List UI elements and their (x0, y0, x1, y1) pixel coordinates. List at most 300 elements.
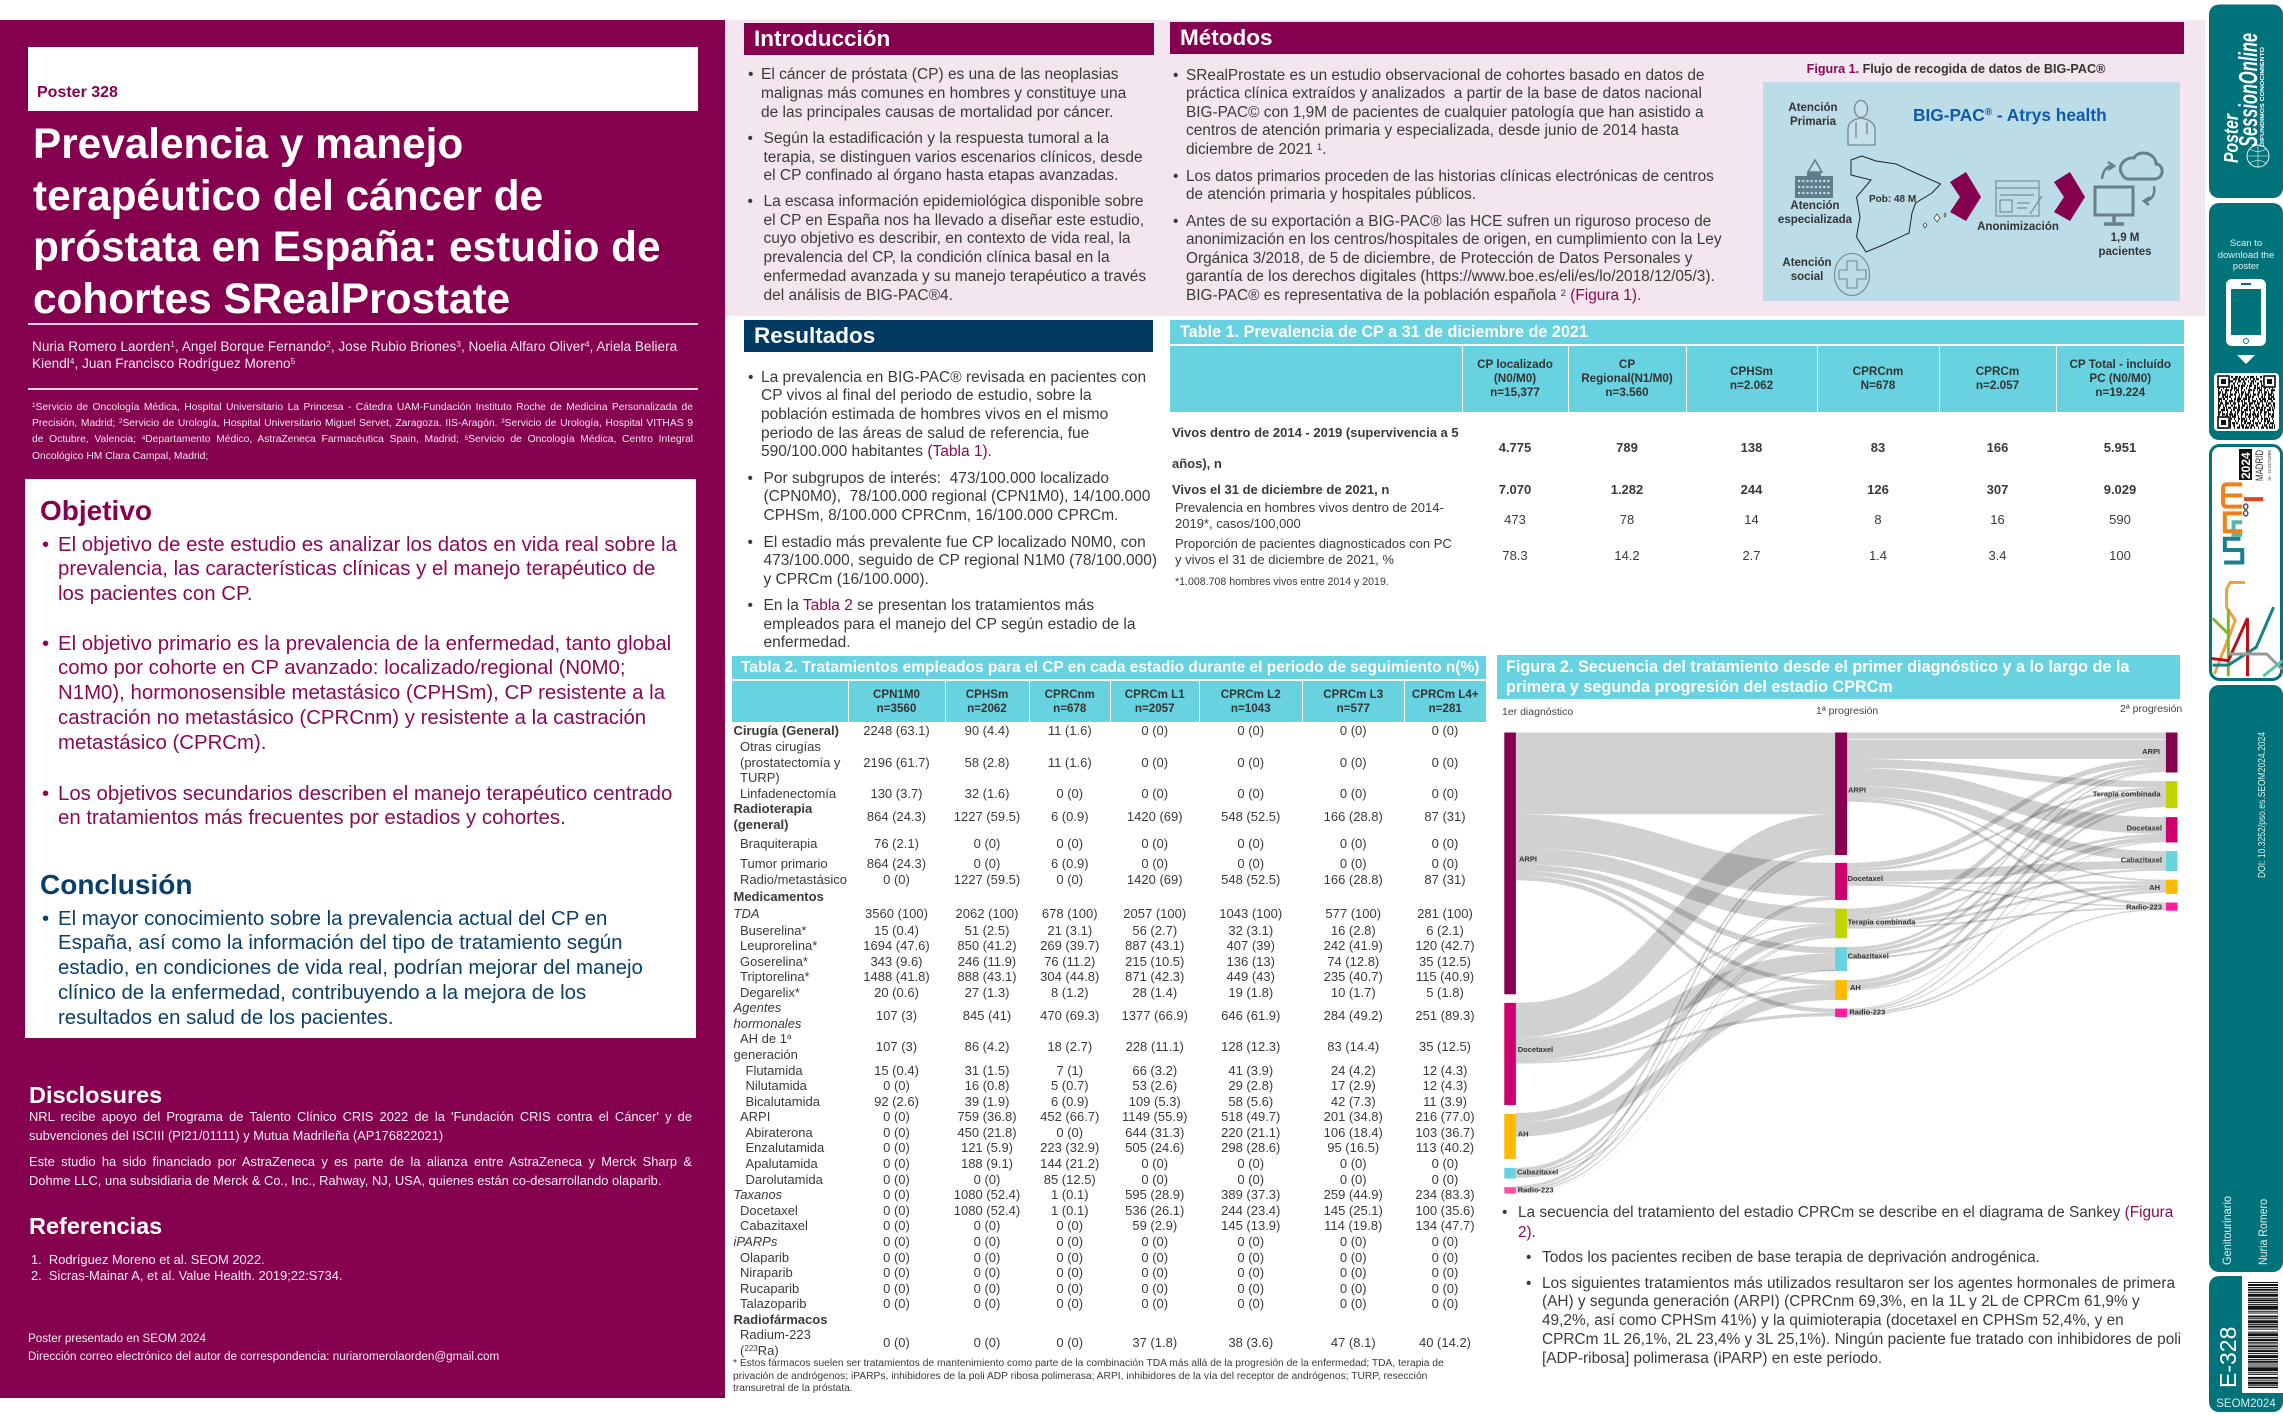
table 2: treatments: 0 (0) (1056, 786, 1083, 801)
table 1: prevalence: 16 (1990, 512, 2005, 527)
table 2: treatments: 2196 (61.7) (863, 755, 930, 770)
table 2: treatments: 87 (31) (1424, 872, 1466, 886)
table 2: treatments: 0 (0) (883, 1234, 910, 1248)
node labels: ARPI (1848, 786, 1866, 794)
table 2: treatments: 0 (0) (1056, 872, 1083, 886)
table 2: treatments: 85 (12.5) (1044, 1172, 1096, 1186)
table 2: treatments: 0 (0) (1141, 1280, 1168, 1296)
table 2: treatments: Talazoparib (740, 1296, 806, 1311)
logo: SEOM 2024 Madrid: MADRID (2254, 450, 2266, 481)
table 2: treatments: 0 (0) (1340, 786, 1367, 801)
table 2: treatments: 0 (0) (974, 1296, 1000, 1311)
text: conclusion (42, 908, 643, 1029)
icon: phone (2226, 279, 2266, 346)
table 2: treatments: 0 (0) (883, 1335, 910, 1350)
barcode (2248, 1282, 2278, 1388)
table 2: treatments: 8 (1.2) (1051, 984, 1089, 1000)
label: primary care: Atención (1788, 102, 1838, 114)
table 1: prevalence: 1.282 (1611, 482, 1643, 497)
table 2: treatments: 12 (4.3) (1423, 1062, 1467, 1078)
node labels (1517, 747, 2162, 1194)
table 1: prevalence: 3.4 (1988, 548, 2007, 563)
methods bullet 3 (1173, 213, 1722, 304)
table 2: treatments: 0 (0) (1237, 1265, 1264, 1280)
table 1: prevalence: años), n (1172, 456, 1222, 471)
table 1: prevalence: Vivos el 31 de diciembre de 2021, n (1172, 482, 1389, 497)
icon: document (1996, 181, 2042, 216)
figure 1 caption: Figura 1. Flujo de recogida de datos de BIG-PAC® (1807, 62, 2105, 76)
table 1: prevalence: 78 (1620, 512, 1634, 527)
table 2: treatments: 577 (100) (1325, 906, 1381, 921)
authors: Kiendl4, Juan Francisco Rodríguez Moreno5 (32, 356, 295, 370)
bullet 3 (42, 783, 672, 829)
table 2: treatments: 0 (0) (1340, 1156, 1367, 1170)
table 1: prevalence: 138 (1741, 440, 1762, 455)
table 2: treatments: 1420 (69) (1127, 809, 1183, 824)
table 2: treatments: 39 (1.9) (965, 1094, 1009, 1108)
table 2: treatments: 1 (0.1) (1051, 1202, 1089, 1218)
table 2: treatments: 7 (1) (1056, 1062, 1083, 1078)
column labels (1502, 703, 2182, 718)
results bullet 3: El estadio más prevalente fue CP localizado N0M0, con (764, 534, 1146, 551)
table 2: treatments: 470 (69.3) (1040, 1008, 1099, 1023)
table 2: treatments: 0 (0) (883, 1202, 910, 1218)
table 2: treatments: 0 (0) (1237, 1156, 1264, 1170)
table 2 footnote: privación de andrógenos; iPARPs, inhibidores de la poli ADP ribosa polimerasa; ARPI, inhibidores de la vía del receptor de andrógenos; TURP, resección (733, 1370, 1427, 1382)
node labels: Cabazitaxel (2121, 856, 2162, 864)
table 2: treatments: 5 (1.8) (1426, 984, 1464, 1000)
table 2: treatments: 0 (0) (1237, 755, 1264, 770)
text: • (1526, 1274, 1531, 1292)
table 2: treatments: n=281 (1429, 702, 1462, 714)
table 2: treatments: 215 (10.5) (1125, 954, 1184, 968)
table 2: treatments: 0 (0) (974, 1234, 1000, 1248)
text: • (42, 908, 49, 930)
table 2: treatments: 505 (24.6) (1125, 1140, 1184, 1155)
title: BIG-PAC Atrys health: BIG-PAC (1913, 105, 1985, 125)
table 2: treatments: 518 (49.7) (1221, 1109, 1280, 1124)
table 2: treatments: 2062 (100) (956, 906, 1018, 921)
table 2: treatments: 548 (52.5) (1221, 809, 1280, 824)
table 2: treatments: 0 (0) (1056, 1124, 1083, 1140)
text: introduction bullets (748, 66, 1146, 304)
table 2: treatments: 259 (44.9) (1324, 1187, 1383, 1202)
flows: first diagnosis to first progression (1516, 732, 1835, 1192)
table 2: treatments: 845 (41) (963, 1008, 1011, 1023)
table 2: treatments: 145 (13.9) (1221, 1218, 1280, 1233)
table 2: treatments: 0 (0) (1237, 1280, 1264, 1296)
table 1: prevalence: 126 (1867, 482, 1889, 497)
main bullet: La secuencia del tratamiento del estadio CPRCm se describe en el diagrama de Sankey (Figura (1518, 1204, 2173, 1221)
table 2: treatments: 0 (0) (1141, 1265, 1168, 1280)
footer note (28, 1332, 499, 1363)
node labels: ARPI (1519, 854, 1537, 864)
table 2: treatments: 0 (0) (1340, 755, 1367, 770)
title: cohortes SRealProstate (33, 275, 510, 322)
table 2: treatments: Apalutamida (746, 1156, 818, 1170)
table 1: prevalence: CP localizado (1477, 358, 1553, 371)
icon: hospital (1795, 160, 1833, 198)
text: • (748, 193, 753, 210)
text: • (748, 130, 753, 147)
table 2: treatments: 0 (0) (1056, 836, 1083, 851)
table 2: treatments: 0 (0) (1432, 1156, 1458, 1170)
results bullet 1: 590/100.000 habitantes (Tabla 1). (761, 443, 992, 460)
table 2: treatments: 0 (0) (974, 1250, 1000, 1264)
table 2 footnote: transuretral de la próstata. (733, 1383, 853, 1394)
title: BIG-PAC Atrys health: ® (1985, 107, 1993, 118)
sub-bullet 2: CPRCm 1L 26,1%, 2L 23,4% y 3L 25,1%). Ningún paciente fue tratado con inhibidores de poli (1542, 1331, 2181, 1348)
table 2: treatments: Buserelina* (740, 922, 806, 938)
table 1: prevalence: n=3.560 (1605, 386, 1649, 399)
results bullet 1 (748, 369, 1146, 460)
table 2: treatments: 42 (7.3) (1331, 1094, 1376, 1108)
table 2: treatments: n=678 (1053, 702, 1086, 714)
table 2: treatments: Nilutamida (746, 1078, 807, 1093)
figure 2 title: primera y segunda progresión del estadio CPRCm (1506, 678, 1893, 696)
table 1: prevalence: 78.3 (1502, 548, 1528, 563)
table 2: treatments: 58 (5.6) (1228, 1094, 1273, 1108)
table 2: treatments: 1080 (52.4) (954, 1202, 1020, 1218)
table 2: treatments: Docetaxel (740, 1202, 798, 1218)
icon: circle with cross (1834, 254, 1870, 296)
table 1: prevalence: CPRCm (1976, 365, 2019, 378)
node labels: Radio-223 (1849, 1007, 1885, 1016)
sub-bullet 2: 49,2%, así como CPHSm 41%) y la quimioterapia (docetaxel en CPHSm 52,4%, y en (1542, 1312, 2124, 1329)
panel: scan to download (2209, 203, 2283, 440)
label: anonymisation: Anonimización (1977, 221, 2059, 233)
right sidebar (2209, 4, 2283, 1412)
text: • (1526, 1248, 1531, 1266)
table 1: prevalence: 166 (1987, 440, 2008, 455)
intro bullet 1 (748, 66, 1126, 121)
table 2: treatments: 0 (0) (1056, 1280, 1083, 1296)
table 2: treatments: 0 (0) (1340, 1265, 1367, 1280)
sub-bullet 2: [ADP-ribosa] polimerasa (iPARP) en este periodo. (1542, 1350, 1882, 1366)
table 2: treatments: AH de 1a (740, 1031, 791, 1046)
table 2: treatments: 32 (1.6) (965, 786, 1009, 801)
table 2: treatments: 220 (21.1) (1221, 1124, 1280, 1140)
table 2: treatments: 0 (0) (883, 1156, 910, 1170)
table 2: treatments: 41 (3.9) (1228, 1062, 1273, 1078)
poster number box: Poster 328 (37, 84, 118, 101)
table 2: treatments: 0 (0) (1056, 1296, 1083, 1311)
table 1: prevalence: 2.7 (1742, 548, 1761, 563)
table 1: prevalence: Regional(N1/M0) (1581, 372, 1673, 385)
node labels: Terapia combinada (2093, 790, 2161, 798)
results bullet 4: empleados para el manejo del CP según estadio de la (764, 616, 1135, 633)
figure 1: data collection flow (1763, 82, 2180, 301)
table 2: treatments: 11 (3.9) (1423, 1094, 1467, 1108)
label: social care: Atención (1782, 257, 1832, 269)
table 2: treatments: 644 (31.3) (1125, 1124, 1184, 1140)
table 2: treatments: 0 (0) (1056, 1265, 1083, 1280)
table 2: treatments: 17 (2.9) (1331, 1078, 1376, 1093)
text: • (42, 783, 49, 805)
node labels: AH (1850, 983, 1861, 992)
table 2: treatments: Goserelina* (740, 954, 808, 968)
table 2: treatments: 87 (31) (1424, 809, 1466, 824)
authors (32, 339, 678, 371)
table 2: treatments: 53 (2.6) (1132, 1078, 1177, 1093)
node labels: Radio-223 (1518, 1186, 1554, 1194)
table 2: treatments: 86 (4.2) (965, 1039, 1009, 1054)
sub-bullet 1: Todos los pacientes reciben de base terapia de deprivación androgénica. (1542, 1248, 2040, 1266)
heading: conclusion: Conclusión (40, 869, 192, 900)
table 1: prevalence: CP Total - incluído (2069, 358, 2171, 371)
table 1: prevalence: 307 (1987, 482, 2008, 497)
table 2: treatments: 21 (3.1) (1047, 922, 1092, 938)
table 2: treatments: 0 (0) (883, 1265, 910, 1280)
logo: SEOM 2024 Madrid: 16 - 18 OCTUBRE (2267, 450, 2272, 481)
table 2: treatments: 166 (28.8) (1324, 809, 1383, 824)
table 1: prevalence: n=2.062 (1730, 379, 1773, 392)
text: • (42, 633, 49, 655)
table 2: treatments: 18 (2.7) (1047, 1039, 1092, 1054)
footer note: Dirección correo electrónico del autor de correspondencia: nuriaromerolaorden@gmail.com (28, 1350, 499, 1363)
table 2: treatments: 536 (26.1) (1125, 1202, 1184, 1218)
methods bullet 1 (1173, 67, 1704, 158)
flows: first progression to second progression (1847, 732, 2166, 1016)
table 2: treatments: 59 (2.9) (1132, 1218, 1177, 1233)
table 2: treatments: 304 (44.8) (1040, 969, 1099, 984)
table 1: prevalence: 2019*, casos/100,000 (1175, 516, 1301, 530)
table 2: treatments: 0 (0) (1340, 1234, 1367, 1248)
methods bullet 1: diciembre de 2021 1. (1186, 141, 1326, 158)
node labels: AH (2149, 883, 2160, 892)
text: conclusion: El mayor conocimiento sobre la prevalencia actual del CP en (58, 908, 607, 930)
table 2: treatments: Darolutamida (746, 1172, 823, 1186)
table 2: treatments: 389 (37.3) (1221, 1187, 1280, 1202)
label: specialised care: especializada (1778, 214, 1853, 226)
table 1: prevalence: 14.2 (1614, 548, 1640, 563)
logo: SEOM 2024 Madrid: 2024 (2239, 452, 2253, 479)
text: objective bullets (42, 534, 677, 829)
table 2: treatments: 16 (2.8) (1331, 922, 1376, 938)
table 2: treatments: 120 (42.7) (1415, 938, 1475, 953)
bullet 2: N1M0), hormonosensible metastásico (CPHSm), CP resistente a la (58, 682, 665, 704)
table 2: treatments: 0 (0) (1432, 1172, 1458, 1186)
list: references (31, 1252, 342, 1283)
logo: PosterSessionOnline: Poster (2221, 113, 2243, 163)
table 2: treatments: generación (734, 1046, 798, 1062)
table 2: treatments: 15 (0.4) (874, 922, 919, 938)
table 1: prevalence: 8 (1874, 512, 1882, 527)
table 1: prevalence: 1.4 (1869, 548, 1887, 563)
panel: objective and conclusion (25, 479, 696, 1038)
logo: PosterSessionOnline (2209, 4, 2283, 198)
table 2: treatments: 90 (4.4) (965, 723, 1009, 738)
table 2: treatments: CPRCm L1 (1125, 688, 1185, 700)
arrow: chevron 2 (2054, 172, 2085, 221)
table 2: treatments: 223 (32.9) (1040, 1140, 1099, 1155)
intro bullet 2: terapia, se distinguen varios escenarios clínicos, desde (764, 149, 1143, 166)
DOI: DOI: 10.3252/pso.es.SEOM2024.2024 (2257, 731, 2268, 878)
methods bullet 2: Los datos primarios proceden de las historias clínicas electrónicas de centros (1186, 168, 1714, 185)
table 2: treatments: Medicamentos (734, 888, 824, 904)
table 2: treatments: Olaparib (740, 1250, 789, 1264)
intro bullet 3: cuyo objetivo es describir, en contexto de vida real, la (764, 230, 1131, 247)
table 1: prevalence: n=2.057 (1976, 379, 2019, 392)
table 2: treatments: 109 (5.3) (1129, 1094, 1181, 1108)
table 2: treatments: 134 (47.7) (1415, 1218, 1475, 1233)
table 2: treatments: 452 (66.7) (1040, 1109, 1099, 1124)
intro bullet 3: La escasa información epidemiológica disponible sobre (764, 193, 1143, 210)
text: disclosures: subvenciones del ISCIII (PI21/01111) y Mutua Madrileña (AP176822021) Dohme LLC, una subsidiaria de Merck & Co., Inc., Rahway, NJ, USA, quienes están co-desarrollando olaparib. (29, 1128, 661, 1188)
table 2: treatments: 0 (0) (1141, 1234, 1168, 1248)
affiliations: 1Servicio de Oncología Médica, Hospital Universitario La Princesa - Cátedra UAM-Fundación Instituto Roche de Medicina Personalizada de (32, 402, 693, 413)
list: references: 1. Rodríguez Moreno et al. SEOM 2022. (31, 1252, 265, 1267)
panel: pink background behind introduction and methods (725, 20, 2205, 316)
table 1: prevalence: Vivos dentro de 2014 - 2019 (supervivencia a 5 (1172, 425, 1459, 440)
table 1: prevalence: 83 (1871, 440, 1885, 455)
table 2: treatments: 871 (42.3) (1125, 969, 1184, 984)
table 2: treatments: CPRCnm (1045, 688, 1095, 700)
icon: doctor (1848, 100, 1875, 145)
table 2 footnote: * Estos fármacos suelen ser tratamientos de mantenimiento como parte de la combinación TDA más allá de la progresión de la enfermedad; TDA, terapia de (733, 1358, 1444, 1369)
table 2: treatments: 166 (28.8) (1324, 872, 1383, 886)
text: results bullets (748, 369, 1157, 651)
column labels: 1er diagnóstico (1502, 706, 1573, 718)
intro bullet 3 (748, 193, 1146, 304)
table 2: treatments: Abiraterona (746, 1124, 813, 1140)
table 2: treatments: 0 (0) (1340, 836, 1367, 851)
node labels: Cabazitaxel (1848, 952, 1889, 960)
table 2: treatments: 145 (25.1) (1324, 1202, 1383, 1218)
table 2: treatments: 0 (0) (1237, 1296, 1264, 1311)
table 2: treatments: 76 (11.2) (1044, 954, 1095, 968)
results bullet 4: enfermedad. (764, 634, 851, 651)
table 2: treatments: 0 (0) (974, 1172, 1000, 1186)
table 2: treatments: n=2057 (1135, 702, 1175, 714)
table 2: treatments: 83 (14.4) (1327, 1039, 1379, 1054)
bullet 2: castración no metastásico (CPRCnm) y resistente a la castración (58, 707, 646, 729)
intro bullet 3: enfermedad avanzada y su manejo terapéutico a través (764, 268, 1146, 285)
table 2: treatments: Enzalutamida (746, 1140, 824, 1155)
table 2: treatments: 11 (1.6) (1048, 723, 1092, 738)
results bullet 2 (748, 470, 1150, 524)
table 2: treatments: 0 (0) (1340, 856, 1367, 870)
table 2: treatments: 130 (3.7) (870, 786, 923, 801)
table 1: prevalence: (N0/M0) (1494, 372, 1536, 385)
logo: SEOM 2024 Madrid (2210, 446, 2282, 680)
table 2: treatments: 0 (0) (1141, 786, 1168, 801)
text: • (42, 534, 49, 556)
table 2: treatments: Agentes hormonales (734, 1000, 801, 1030)
table 2: treatments: CPRCm L2 (1221, 688, 1281, 700)
table 2: treatments: 0 (0) (1141, 856, 1168, 870)
table 2: treatments: 6 (0.9) (1051, 856, 1089, 870)
node labels: ARPI (2142, 747, 2160, 756)
node labels: Docetaxel (1848, 874, 1883, 883)
table 2: treatments: 56 (2.7) (1132, 922, 1177, 938)
table 2: treatments: 548 (52.5) (1221, 872, 1280, 886)
table 2: treatments: 298 (28.6) (1221, 1140, 1280, 1155)
table 2: treatments: Otras cirugías (prostatectomía y TURP) (740, 739, 840, 785)
table 2: treatments: Rucaparib (740, 1280, 799, 1296)
table 2: treatments: n=577 (1337, 702, 1370, 714)
scan text: Scan to (2230, 238, 2262, 249)
table 2: treatments: 0 (0) (1432, 856, 1458, 870)
table 2: treatments: 0 (0) (974, 1280, 1000, 1296)
table 2: treatments: 450 (21.8) (957, 1124, 1017, 1140)
methods bullet 3: BIG-PAC® es representativa de la población española 2 (Figura 1). (1186, 287, 1641, 304)
panel: DOI, category and author (2209, 685, 2283, 1272)
table 1: prevalence: 9.029 (2104, 482, 2136, 497)
table 2: treatments: 0 (0) (883, 1109, 910, 1124)
table 2: treatments: Leuprorelina* (740, 938, 817, 953)
text: conclusion: España, así como la información del tipo de tratamiento según (58, 932, 622, 954)
table 2: treatments: 646 (61.9) (1221, 1008, 1280, 1023)
text: • (1173, 67, 1178, 84)
sub-bullet 2: Los siguientes tratamientos más utilizados resultaron ser los agentes hormonales de primera (1542, 1274, 2175, 1292)
text: • (1502, 1204, 1507, 1221)
table 2: treatments: 107 (3) (876, 1039, 917, 1054)
sub-bullet 2 (1526, 1274, 2181, 1366)
table 2: treatments: 121 (5.9) (961, 1140, 1013, 1155)
table 2: treatments: 10 (1.7) (1331, 984, 1376, 1000)
table 2: treatments: 0 (0) (883, 1140, 910, 1155)
table 2: treatments: iPARPs (734, 1234, 777, 1248)
table 2: treatments: 269 (39.7) (1040, 938, 1099, 953)
table 2: treatments: 0 (0) (1432, 836, 1458, 851)
figure 2 title (1497, 655, 2180, 699)
table 2: treatments: 66 (3.2) (1132, 1062, 1177, 1078)
table 2: treatments: 1420 (69) (1127, 872, 1183, 886)
node labels: Terapia combinada (1848, 918, 1916, 926)
table 2: treatments: 51 (2.5) (965, 922, 1009, 938)
table 2: treatments: 0 (0) (1141, 1296, 1168, 1311)
table 2: treatments: 35 (12.5) (1419, 954, 1471, 968)
label: population: Pob: 48 M (1869, 194, 1916, 205)
table 2: treatments: Cabazitaxel (740, 1218, 808, 1233)
table 1: prevalence: n=15,377 (1490, 386, 1540, 399)
divider under authors (28, 388, 698, 390)
table 2: treatments: 0 (0) (883, 1124, 910, 1140)
text: disclosures: Este studio ha sido financiado por AstraZeneca y es parte de la alianza entre AstraZeneca y Merck Sharp & (29, 1154, 692, 1169)
table 2: treatments: 0 (0) (1141, 755, 1168, 770)
table 2: treatments: 0 (0) (1432, 1296, 1458, 1311)
table 1: prevalence: Proporción de pacientes diagnosticados con PC (1175, 536, 1452, 551)
text: Sankey description (1502, 1204, 2181, 1366)
table 2 title: Tabla 2. Tratamientos empleados para el CP en cada estadio durante el periodo de seguimiento n(%) (741, 659, 1479, 676)
table 2: treatments: 0 (0) (1056, 1218, 1083, 1233)
table 2: treatments: 58 (2.8) (965, 755, 1009, 770)
table 2: treatments: 0 (0) (974, 1265, 1000, 1280)
methods bullet 1: BIG-PAC© con 1,9M de pacientes de cualquier patología que han asistido a (1186, 104, 1704, 121)
table 2: treatments: 0 (0) (1141, 1250, 1168, 1264)
table 2: treatments: 3560 (100) (865, 906, 928, 921)
author: Nuria Romero (2256, 1199, 2270, 1265)
table 2: treatments: 0 (0) (1141, 1156, 1168, 1170)
table 2: treatments: 0 (0) (1141, 1172, 1168, 1186)
table 2: treatments: 0 (0) (974, 1218, 1000, 1233)
table 2: treatments: 0 (0) (1056, 1234, 1083, 1248)
results bullet 3: 473/100.000, seguido de CP regional N1M0 (78/100.000) (764, 552, 1157, 569)
table 2: treatments: 128 (12.3) (1221, 1039, 1280, 1054)
table 1: prevalence: 473 (1504, 512, 1526, 527)
table 2: treatments: 0 (0) (1432, 1250, 1458, 1264)
table 2: treatments: 0 (0) (974, 836, 1000, 851)
table 2: treatments: 31 (1.5) (965, 1062, 1009, 1078)
table 2: treatments: 0 (0) (1432, 723, 1458, 738)
table 1: prevalence: 100 (2109, 548, 2131, 563)
divider under title (28, 323, 698, 324)
table 1 title: Table 1. Prevalencia de CP a 31 de diciembre de 2021 (1180, 323, 1588, 341)
table 2: treatments: 136 (13) (1227, 954, 1275, 968)
heading: references: Referencias (29, 1213, 162, 1239)
table 2: treatments: Radium-223 (223Ra) (740, 1327, 811, 1358)
